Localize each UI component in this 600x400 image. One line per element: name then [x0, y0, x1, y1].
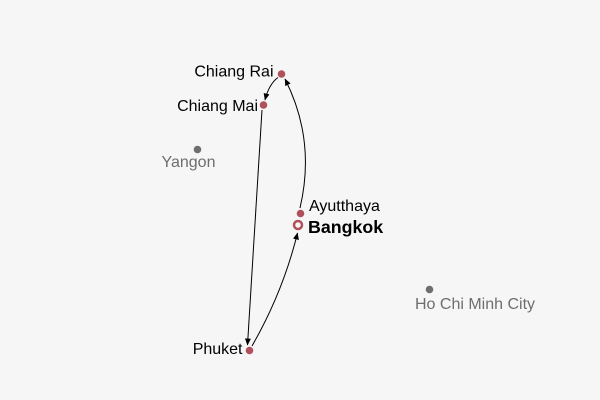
arrow: Chiang Mai to Phuket [248, 110, 262, 345]
stop: Ayutthaya: Ayutthaya [309, 198, 380, 215]
arrow: Phuket to Bangkok [252, 233, 298, 346]
arrow: Ayutthaya to Chiang Rai [285, 79, 305, 208]
stop: Phuket: Phuket [193, 341, 243, 358]
city: Ho Chi Minh City: Ho Chi Minh City [415, 296, 535, 313]
city: Ho Chi Minh City [415, 286, 535, 313]
city: Yangon [162, 146, 215, 171]
arrow: Chiang Rai to Chiang Mai [265, 78, 278, 100]
stop: Bangkok: Bangkok [308, 217, 383, 237]
stop: Chiang Rai: Chiang Rai [194, 64, 274, 80]
stop: Chiang Mai: Chiang Mai [177, 98, 258, 115]
route arrows [248, 78, 305, 346]
city: Yangon: Yangon [162, 154, 215, 171]
